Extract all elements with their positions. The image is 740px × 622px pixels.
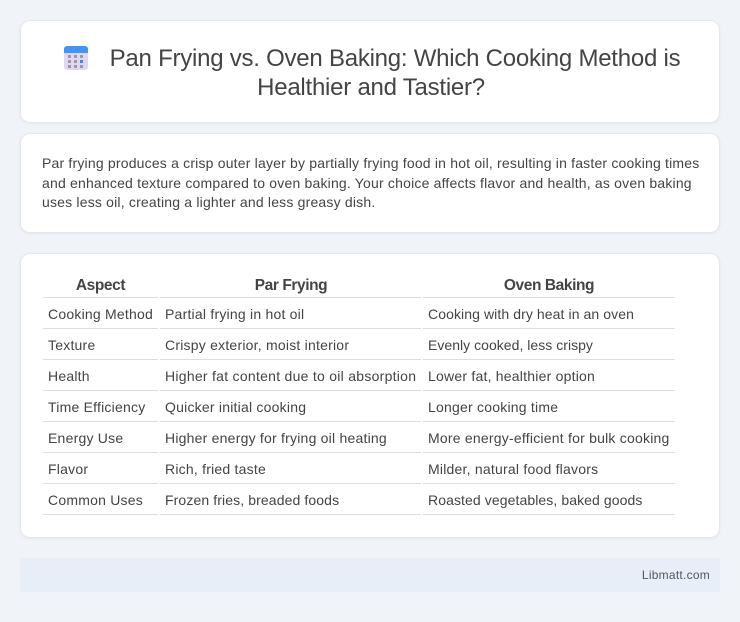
panel: intro paragraph [20, 133, 720, 233]
row: health: Lower fat, healthier option [428, 368, 595, 384]
row: texture: Texture [48, 337, 95, 353]
row: cooking method [48, 306, 634, 322]
row: health: Higher fat content due to oil absorption [165, 368, 416, 384]
row: common uses: Roasted vegetables, baked goods [428, 492, 642, 508]
row: time efficiency: Longer cooking time [428, 399, 558, 415]
title: Pan Frying vs. Oven Baking: Which Cooking Method is [110, 45, 680, 72]
intro text: Par frying produces a crisp outer layer by partially frying food in hot oil, resulting in faster cooking times [42, 155, 699, 171]
row: flavor: Flavor [48, 461, 88, 477]
comparison table [43, 277, 675, 515]
row: flavor: Milder, natural food flavors [428, 461, 598, 477]
row: common uses: Frozen fries, breaded foods [165, 492, 339, 508]
row: time efficiency: Quicker initial cooking [165, 399, 306, 415]
row: texture: Evenly cooked, less crispy [428, 337, 593, 353]
footer bar [20, 558, 720, 592]
row: texture [48, 337, 593, 353]
row: energy use: Higher energy for frying oil heating [165, 430, 387, 446]
row: health: Health [48, 368, 90, 384]
row: time efficiency: Time Efficiency [48, 399, 145, 415]
row: texture: Crispy exterior, moist interior [165, 337, 349, 353]
row: cooking method: Partial frying in hot oil [165, 306, 304, 322]
row: cooking method: Cooking Method [48, 306, 153, 322]
row: time efficiency [48, 399, 558, 415]
row: flavor [48, 461, 598, 477]
row: common uses: Common Uses [48, 492, 143, 508]
header row: Par Frying [255, 277, 327, 294]
row: health [48, 368, 595, 384]
header row: Aspect [76, 277, 125, 294]
icon: calendar [64, 46, 88, 70]
row: cooking method: Cooking with dry heat in an oven [428, 306, 634, 322]
row: energy use: Energy Use [48, 430, 123, 446]
row: energy use [48, 430, 670, 446]
row: common uses [48, 492, 642, 508]
panel: title card [20, 20, 720, 123]
intro text [42, 155, 699, 210]
footer credit: Libmatt.com [642, 568, 710, 582]
header row: Oven Baking [504, 277, 594, 294]
intro text: uses less oil, creating a lighter and less greasy dish. [42, 194, 375, 210]
row: flavor: Rich, fried taste [165, 461, 266, 477]
title [110, 45, 680, 101]
header row [76, 277, 594, 294]
title: Healthier and Tastier? [257, 74, 485, 101]
row: energy use: More energy-efficient for bulk cooking [428, 430, 670, 446]
intro text: and enhanced texture compared to oven baking. Your choice affects flavor and health, as oven baking [42, 175, 692, 191]
panel: comparison table [20, 253, 720, 538]
